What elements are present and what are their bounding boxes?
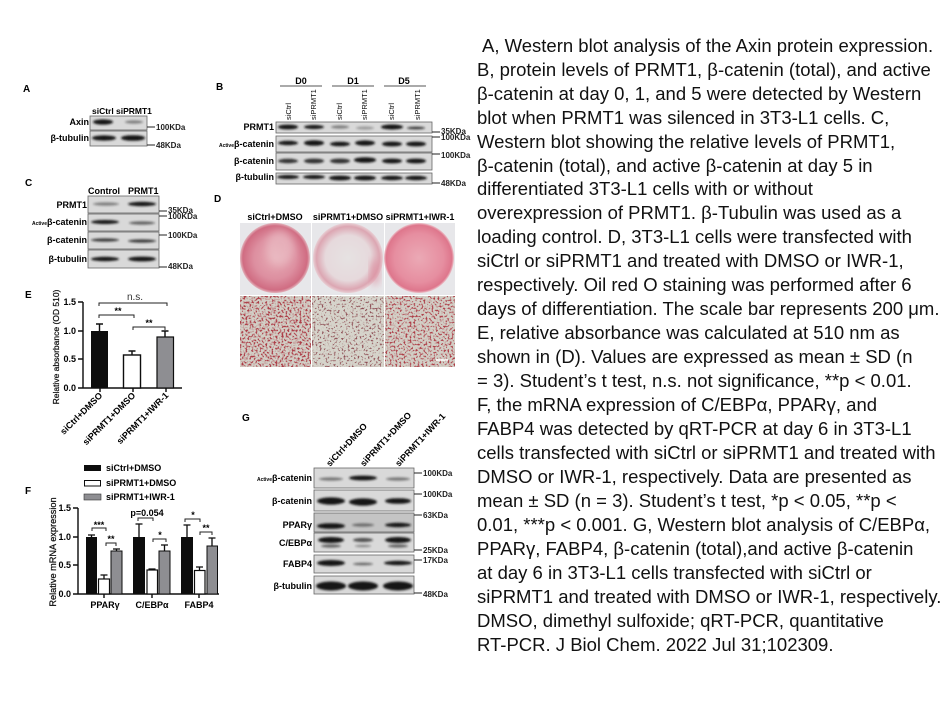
panel B: time course blot: Activeβ-catenin <box>219 139 274 149</box>
panel letter A: A <box>23 84 30 95</box>
blot rows <box>88 196 159 213</box>
panel F: relative mRNA expression bar chart: *** <box>94 520 105 530</box>
lane labels: siPRMT1 <box>116 106 152 116</box>
figure panels <box>23 76 471 610</box>
caption text: loading control. D, 3T3-L1 cells were transfected with <box>477 226 912 247</box>
panel C: PRMT1 overexpression blot: 100KDa <box>168 212 198 221</box>
microscopy fields <box>240 296 455 367</box>
legend <box>84 463 176 502</box>
panel F: relative mRNA expression bar chart <box>25 463 219 610</box>
panel G: marker protein blot: β-tubulin <box>274 581 312 591</box>
panel G: marker protein blot: 100KDa <box>423 469 453 478</box>
row labels: Axin <box>69 117 89 127</box>
caption text: siPRMT1 and treated with DMSO or IWR-1, respectively. <box>477 586 941 607</box>
x tick labels: siCtrl+DMSO <box>58 390 104 436</box>
lane labels: siPRMT1+IWR-1 <box>393 411 447 468</box>
caption text: siCtrl or siPRMT1 and treated with DMSO or IWR-1, <box>477 250 904 271</box>
panel C: PRMT1 overexpression blot: 48KDa <box>168 262 193 271</box>
x group labels <box>90 600 214 610</box>
panel A: Axin western blot: β-tubulin <box>51 133 89 143</box>
blot rows <box>90 116 147 130</box>
panel G: marker protein blot <box>242 410 453 599</box>
panel G: marker protein blot: 63KDa <box>423 511 448 520</box>
panel B: time course blot: 48KDa <box>441 179 466 188</box>
dish photos <box>240 223 455 295</box>
caption text: respectively. Oil red O staining was performed after 6 <box>477 274 912 295</box>
panel B: time course blot: 100KDa <box>441 151 471 160</box>
panel G: marker protein blot: 17KDa <box>423 556 448 565</box>
x group labels: PPARγ <box>90 600 120 610</box>
legend: siPRMT1+DMSO <box>106 478 176 488</box>
size markers <box>414 473 422 593</box>
lane labels: siCtrl <box>284 103 293 120</box>
significance brackets <box>92 518 212 546</box>
caption text: shown in (D). Values are expressed as mean ± SD (n <box>477 346 912 367</box>
caption text: overexpression of PRMT1. β-Tubulin was used as a <box>477 202 902 223</box>
caption text: Western blot showing the relative levels of PRMT1, <box>477 131 895 152</box>
condition headers: siCtrl+DMSO <box>247 212 303 222</box>
blot rows <box>276 122 432 133</box>
panel G: marker protein blot: C/EBPα <box>279 538 312 548</box>
axes <box>78 302 182 392</box>
legend: siCtrl+DMSO <box>106 463 161 473</box>
day headers: D1 <box>347 76 359 86</box>
caption text: β-catenin (total), and active β-catenin at day 5 in <box>477 155 873 176</box>
caption text: days of differentiation. The scale bar represents 200 μm. <box>477 298 939 319</box>
lane labels: siPRMT1 <box>309 89 318 120</box>
day headers: D0 <box>295 76 307 86</box>
condition headers: siPRMT1+IWR-1 <box>386 212 454 222</box>
condition headers <box>247 212 454 222</box>
y tick labels: 0.5 <box>58 560 71 570</box>
row labels: PRMT1 <box>56 200 87 210</box>
error bars <box>88 524 216 579</box>
lane labels: siCtrl+DMSO <box>324 421 369 468</box>
row labels: Activeβ-catenin <box>257 473 312 483</box>
y tick labels: 1.0 <box>58 532 71 542</box>
size markers <box>147 127 155 145</box>
panel letter F: F <box>25 486 31 497</box>
panel letter G: G <box>242 413 250 424</box>
axes <box>73 508 219 598</box>
y axis title: Relative absorbance (OD 510) <box>51 289 61 404</box>
row labels: PRMT1 <box>243 122 274 132</box>
panel letter E: E <box>25 290 32 301</box>
panel A: Axin western blot: 48KDa <box>156 141 181 150</box>
panel G: marker protein blot: 25KDa <box>423 546 448 555</box>
legend: siPRMT1+IWR-1 <box>106 492 175 502</box>
y tick labels <box>58 503 71 599</box>
caption text: FABP4 was detected by qRT-PCR at day 6 in 3T3-L1 <box>477 418 912 439</box>
lane labels: siPRMT1+DMSO <box>358 410 413 468</box>
caption text: E, relative absorbance was calculated at 510 nm as <box>477 322 900 343</box>
caption text: β-catenin at day 0, 1, and 5 were detected by Western <box>477 83 921 104</box>
panel G: marker protein blot: 48KDa <box>423 590 448 599</box>
panel B: time course blot: β-tubulin <box>236 172 274 182</box>
panel G: marker protein blot: FABP4 <box>283 559 312 569</box>
panel F: relative mRNA expression bar chart: * <box>191 510 195 520</box>
y tick labels: 0.0 <box>63 383 76 393</box>
lane labels: siCtrl <box>335 103 344 120</box>
day headers <box>280 76 426 86</box>
caption text: PPARγ, FABP4, β-catenin (total),and active β-catenin <box>477 538 913 559</box>
panel G: marker protein blot: β-catenin <box>272 496 312 506</box>
lane labels <box>284 89 422 120</box>
y tick labels: 0.0 <box>58 589 71 599</box>
panel B: time course blot <box>216 76 471 188</box>
panel letter B: B <box>216 82 223 93</box>
panel C: PRMT1 overexpression blot: PRMT1 <box>128 186 159 196</box>
panel letter C: C <box>25 178 32 189</box>
lane labels: siCtrl <box>92 106 114 116</box>
panel A: Axin western blot: 100KDa <box>156 123 186 132</box>
caption text <box>477 35 941 655</box>
caption text: mean ± SD (n = 3). Student’s t test, *p < 0.05, **p < <box>477 490 897 511</box>
caption text: B, protein levels of PRMT1, β-catenin (total), and active <box>477 59 931 80</box>
caption text: differentiated 3T3-L1 cells with or without <box>477 178 813 199</box>
panel B: time course blot: 100KDa <box>441 133 471 142</box>
caption text: = 3). Student’s t test, n.s. not significance, **p < 0.01. <box>477 370 912 391</box>
caption text: F, the mRNA expression of C/EBPα, PPARγ, and <box>477 394 877 415</box>
panel F: relative mRNA expression bar chart: p=0.054 <box>130 508 164 518</box>
panel F: relative mRNA expression bar chart: ** <box>107 534 115 544</box>
panel C: PRMT1 overexpression blot: 35KDa <box>168 206 193 215</box>
panel letter D: D <box>214 194 221 205</box>
caption text: A, Western blot analysis of the Axin protein expression. <box>482 35 933 56</box>
panel D: oil red O staining <box>214 194 455 367</box>
panel C: PRMT1 overexpression blot <box>25 178 198 271</box>
y tick labels: 1.0 <box>63 326 76 336</box>
lane labels: siCtrl <box>387 103 396 120</box>
panel G: marker protein blot: 100KDa <box>423 490 453 499</box>
blot rows <box>314 468 414 488</box>
y tick labels: 0.5 <box>63 354 76 364</box>
caption text: at day 6 in 3T3-L1 cells transfected with siCtrl or <box>477 562 872 583</box>
x group labels: C/EBPα <box>135 600 169 610</box>
significance brackets <box>99 303 167 330</box>
y axis title: Relative mRNA expression <box>48 497 58 607</box>
lane labels: siPRMT1 <box>413 89 422 120</box>
panel E: relative absorbance bar chart: ** <box>145 318 153 328</box>
caption text: 0.01, ***p < 0.001. G, Western blot analysis of C/EBPα, <box>477 514 930 535</box>
bars <box>96 324 168 355</box>
x tick labels: siPRMT1+IWR-1 <box>115 390 170 446</box>
bars <box>86 537 218 594</box>
caption text: DMSO or IWR-1, respectively. Data are presented as <box>477 466 912 487</box>
y tick labels <box>63 297 76 393</box>
y tick labels: 1.5 <box>63 297 76 307</box>
size markers <box>432 132 440 183</box>
x tick labels: siPRMT1+DMSO <box>81 390 137 447</box>
panel F: relative mRNA expression bar chart: * <box>158 530 162 540</box>
caption text: cells transfected with siCtrl or siPRMT1 and treated with <box>477 442 936 463</box>
panel C: PRMT1 overexpression blot: Activeβ-catenin <box>32 217 87 227</box>
x group labels: FABP4 <box>184 600 214 610</box>
caption text: DMSO, dimethyl sulfoxide; qRT-PCR, quantitative <box>477 610 884 631</box>
size markers <box>159 211 167 267</box>
panel B: time course blot: β-catenin <box>234 156 274 166</box>
caption text: blot when PRMT1 was silenced in 3T3-L1 cells. C, <box>477 107 889 128</box>
lane labels <box>324 410 447 468</box>
condition headers: siPRMT1+DMSO <box>313 212 383 222</box>
y tick labels: 1.5 <box>58 503 71 513</box>
caption text: RT-PCR. J Biol Chem. 2022 Jul 31;102309. <box>477 634 834 655</box>
panel G: marker protein blot: PPARγ <box>283 520 312 530</box>
lane labels: Control <box>88 186 120 196</box>
lane labels: siPRMT1 <box>360 89 369 120</box>
panel E: relative absorbance bar chart <box>25 289 182 447</box>
x tick labels <box>58 390 170 447</box>
panel A: Axin western blot <box>23 84 186 150</box>
panel C: PRMT1 overexpression blot: 100KDa <box>168 231 198 240</box>
day headers: D5 <box>398 76 410 86</box>
panel C: PRMT1 overexpression blot: β-catenin <box>47 235 87 245</box>
panel E: relative absorbance bar chart: ** <box>114 306 122 316</box>
panel C: PRMT1 overexpression blot: β-tubulin <box>49 254 87 264</box>
lane labels <box>92 106 152 116</box>
panel E: relative absorbance bar chart: n.s. <box>127 292 143 303</box>
panel B: time course blot: 35KDa <box>441 127 466 136</box>
panel F: relative mRNA expression bar chart: ** <box>202 523 210 533</box>
